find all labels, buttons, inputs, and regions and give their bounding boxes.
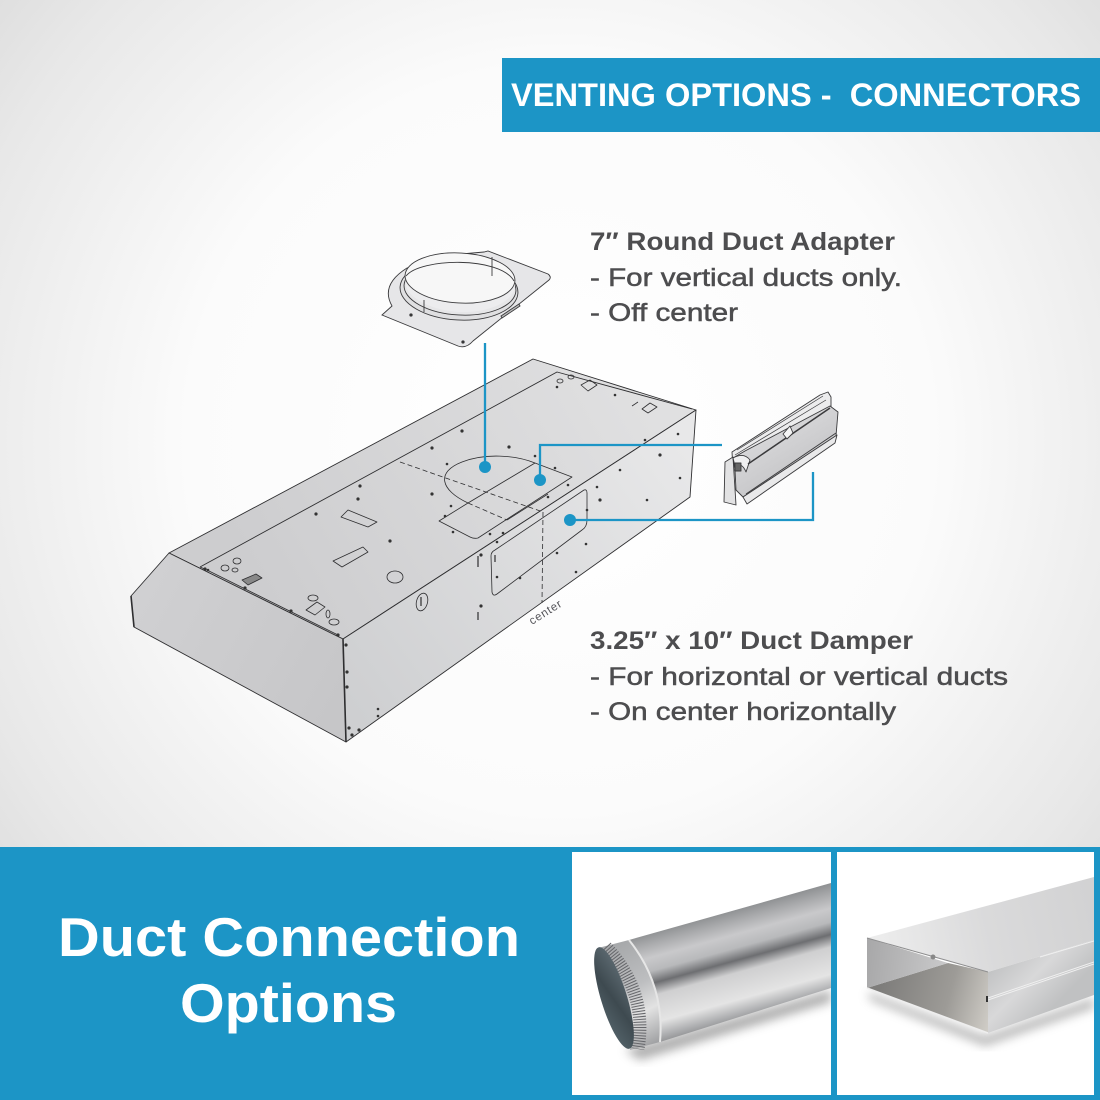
connector line: adapter <box>479 343 491 473</box>
text block: round duct adapter: 7″ Round Duct Adapter <box>590 228 895 256</box>
photo: rectangular duct <box>837 852 1094 1095</box>
bottom heading: Duct Connection <box>58 906 520 968</box>
text block: round duct adapter: - For vertical ducts only. <box>590 264 902 292</box>
cutouts <box>221 375 657 625</box>
round duct adapter illustration <box>382 250 550 347</box>
photo: round duct <box>572 852 831 1095</box>
text block: round duct adapter: - Off center <box>590 299 738 327</box>
text block: duct damper: - For horizontal or vertical ducts <box>590 663 1008 691</box>
connector line: damper side <box>564 472 813 526</box>
screw holes <box>203 386 681 737</box>
background <box>0 0 1100 850</box>
bottom band <box>0 847 1100 1100</box>
connector line: damper top <box>534 445 722 486</box>
text block: duct damper: 3.25″ x 10″ Duct Damper <box>590 627 913 655</box>
title banner: VENTING OPTIONS - CONNECTORS <box>511 77 1081 113</box>
damper illustration <box>724 392 838 505</box>
hood faces <box>131 359 696 742</box>
bottom heading: Options <box>180 972 397 1034</box>
text block: duct damper <box>590 627 1008 726</box>
bottom heading <box>58 906 520 1034</box>
range hood illustration <box>131 359 696 742</box>
text block: round duct adapter <box>590 228 902 327</box>
title banner <box>502 58 1100 132</box>
center label: center <box>527 598 564 628</box>
text block: duct damper: - On center horizontally <box>590 698 897 726</box>
